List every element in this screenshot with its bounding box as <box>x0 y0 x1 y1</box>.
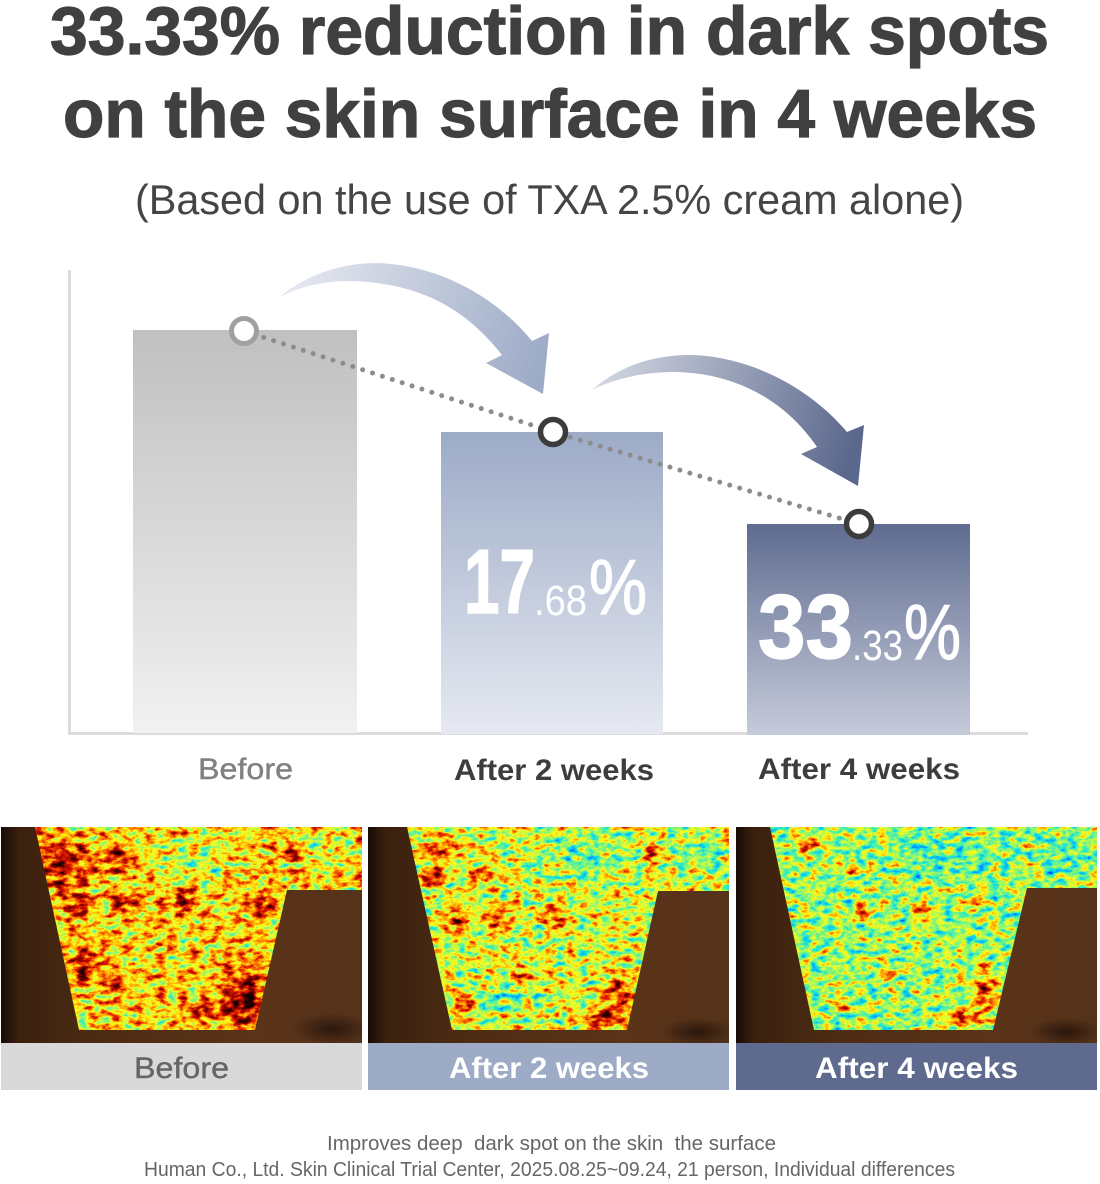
value: 17.68%: .68 <box>534 577 587 625</box>
bar: after 4 weeks <box>747 524 970 735</box>
arrow: before to 2 weeks <box>278 263 549 394</box>
marker: before <box>232 318 256 344</box>
marker: after 2 weeks <box>540 420 566 444</box>
value: 33.33% <box>758 577 961 678</box>
label bar: before <box>1 1043 362 1090</box>
label bar: after 2 weeks <box>368 1043 729 1090</box>
bar chart <box>70 263 1028 787</box>
axis label: before: Before <box>198 753 293 786</box>
value: 33.33%: 33 <box>758 577 853 678</box>
marker: after 4 weeks <box>846 512 872 536</box>
footnote: Improves deep dark spot on the skin the surface <box>327 1133 776 1155</box>
photo panel: after 4 weeks <box>736 823 1100 1046</box>
bar: before <box>133 330 357 733</box>
footnote: Human Co., Ltd. Skin Clinical Trial Center, 2025.08.25~09.24, 21 person, Individual differences <box>144 1159 955 1181</box>
footnote <box>144 1133 955 1181</box>
title <box>50 0 1049 152</box>
value: 33.33%: % <box>904 588 961 676</box>
label bar: after 4 weeks <box>736 1043 1097 1090</box>
value: 17.68%: % <box>589 543 647 631</box>
value: 17.68%: 17 <box>464 532 535 633</box>
value: 33.33%: .33 <box>852 622 903 670</box>
value: 17.68% <box>464 532 647 633</box>
dotted trend line <box>244 331 859 524</box>
label bar: after 2 weeks: After 2 weeks <box>449 1052 649 1085</box>
axis label: after 2 weeks: After 2 weeks <box>454 754 654 787</box>
title: on the skin surface in 4 weeks <box>63 76 1037 152</box>
subtitle: (Based on the use of TXA 2.5% cream alone) <box>135 176 964 223</box>
axis label: after 4 weeks: After 4 weeks <box>758 753 960 786</box>
bar: after 2 weeks <box>441 432 663 734</box>
photo panel: after 2 weeks <box>368 817 740 1046</box>
arrow: 2 weeks to 4 weeks <box>592 355 864 486</box>
label bar: before: Before <box>134 1052 229 1085</box>
photo panel: before <box>1 823 372 1045</box>
label bar: after 4 weeks: After 4 weeks <box>815 1052 1018 1085</box>
